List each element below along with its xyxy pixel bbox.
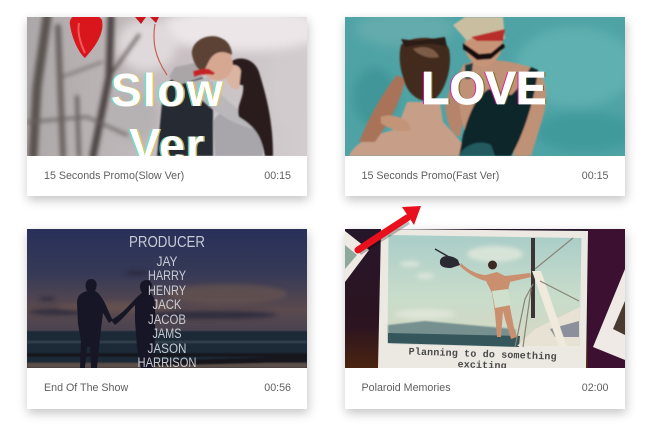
- caption: End Of The Show: [44, 382, 128, 394]
- credits text: JACK: [152, 297, 182, 312]
- photo: couple with balloons: [27, 17, 307, 156]
- caption: 15 Seconds Promo(Slow Ver): [44, 170, 184, 182]
- credits text: [129, 234, 205, 370]
- icon: red balloons: [70, 13, 167, 75]
- card: slow version promo: [27, 17, 307, 196]
- duration: 00:56: [264, 382, 291, 394]
- title text: Slow Ver: [109, 64, 226, 171]
- title text: Slow Ver: Slow: [111, 64, 224, 116]
- left polaroid scrap: [344, 231, 368, 282]
- credits text: JAMS: [152, 326, 182, 341]
- duration: 02:00: [582, 382, 608, 394]
- polaroid handwriting: Planning to do something: [408, 346, 556, 364]
- man on railing: [434, 249, 530, 339]
- credits text: HARRY: [148, 268, 186, 283]
- title text: Slow Ver: Slow: [109, 64, 223, 116]
- main polaroid: [378, 229, 588, 368]
- title text: LOVE: LOVE: [419, 62, 545, 114]
- polaroid handwriting: [408, 346, 556, 373]
- credits text: JASON: [148, 341, 186, 356]
- title text: Slow Ver: Slow: [112, 64, 226, 116]
- caption: Polaroid Memories: [362, 382, 451, 394]
- card: fast version promo: [344, 17, 624, 196]
- credits text: HENRY: [148, 283, 186, 298]
- caption: 15 Seconds Promo(Fast Ver): [362, 170, 499, 182]
- photo: polaroids on dark background: [345, 229, 625, 368]
- credits text: JACOB: [148, 312, 186, 327]
- title text: LOVE: LOVE: [422, 62, 548, 114]
- boat: [514, 238, 580, 347]
- arrow: red pointer: [354, 206, 421, 255]
- right polaroid scrap: [592, 269, 624, 360]
- duration: 00:15: [582, 170, 608, 182]
- card: polaroid memories: [344, 229, 624, 409]
- silhouette: couple holding hands: [77, 279, 155, 368]
- photo: two women by the water: [345, 17, 625, 156]
- photo: couple at sunset with credits: [27, 229, 307, 368]
- card: end of the show: [27, 229, 307, 409]
- credits text: PRODUCER: [129, 234, 205, 251]
- couple: [157, 36, 273, 156]
- duration: 00:15: [264, 170, 291, 182]
- credits text: JAY: [156, 254, 178, 269]
- title text: LOVE: LOVE: [421, 62, 546, 114]
